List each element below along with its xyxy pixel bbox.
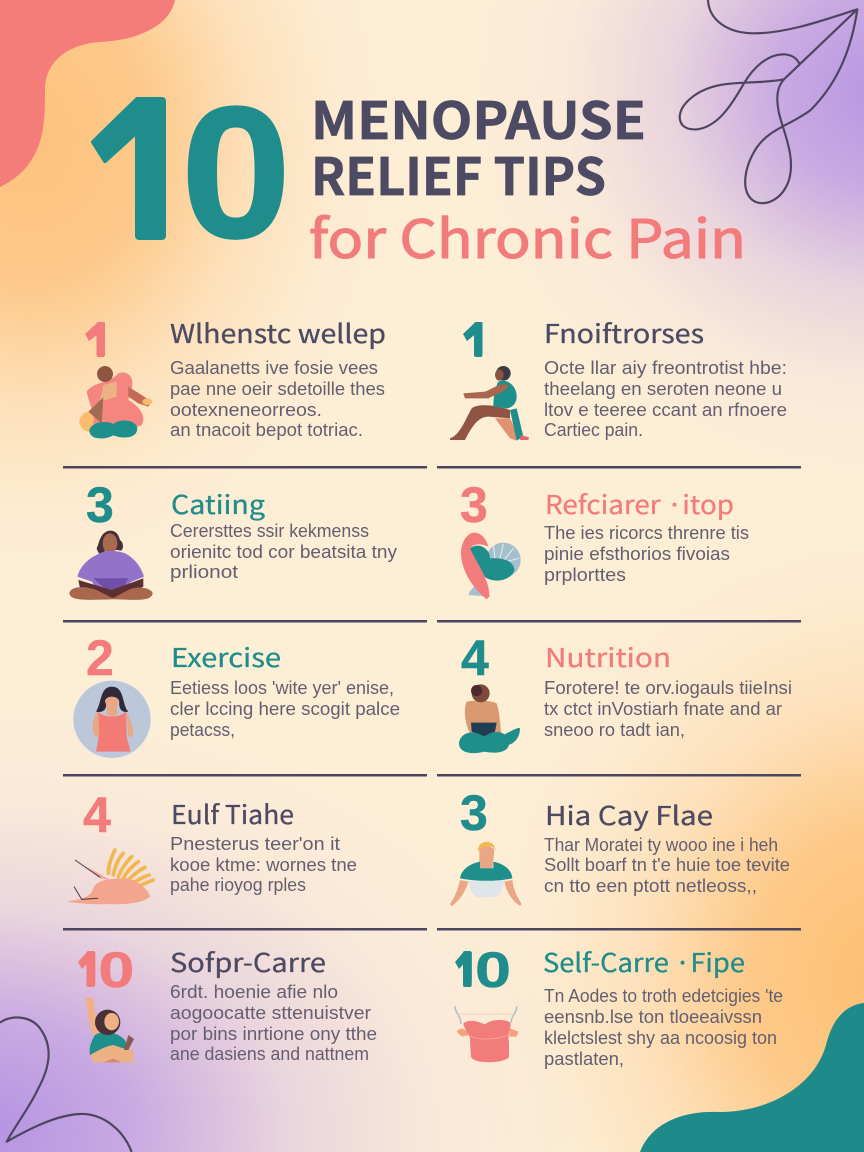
title: line one: MENOPAUSE — [311, 80, 646, 154]
icon: seated woman in coral — [79, 366, 152, 438]
number: 2 — [86, 630, 114, 686]
icon: woman raising arm — [85, 997, 140, 1062]
icon: meditating woman in purple — [69, 531, 153, 600]
number: 3 — [460, 785, 488, 841]
description — [544, 358, 787, 440]
panel: tip row 3 right — [459, 630, 792, 753]
icon: seated figure with teal legs — [459, 684, 520, 753]
description: pahe rioyog rples — [170, 875, 306, 895]
description: pae nne oeir sdetoille thes — [170, 379, 385, 399]
description: Cerersttes ssir kekmenss — [170, 521, 369, 541]
panel: tip row 3 left — [73, 630, 400, 758]
description: Tn Aodes to troth edetcigies 'te — [544, 986, 783, 1006]
number — [78, 951, 132, 988]
blob: coral top-left — [0, 0, 175, 187]
heading: Refciarer ·itop — [545, 485, 734, 522]
panel: tip row 2 left — [69, 477, 397, 600]
description: Thar Moratei ty wooo ine i heh — [544, 835, 778, 855]
panel: tip row 4 left — [67, 787, 357, 904]
description: klelctslest shy aa ncoosig ton — [544, 1028, 777, 1048]
title: big number 10: 1 — [102, 68, 196, 277]
description: Forotere! te orv.iogauls tiieInsi — [544, 678, 792, 698]
icon: woman in coral dress inside circle — [73, 681, 151, 758]
description: ltov e teeree ccant an rfnoere — [544, 400, 787, 420]
heading: Self-Carre ·Fipe — [543, 943, 745, 980]
description — [544, 835, 790, 896]
description: prlionot — [170, 562, 238, 582]
description: cler lccing here scogit palce — [170, 699, 400, 719]
number: 3 — [460, 477, 488, 533]
description — [170, 678, 400, 740]
number — [455, 951, 509, 988]
heading: Wlhenstc wellep — [170, 314, 386, 351]
number: 1 — [87, 312, 115, 368]
icon: kneeling stretch figure — [450, 366, 529, 441]
description: pastlaten, — [544, 1049, 624, 1069]
description: petacss, — [170, 720, 235, 740]
description — [544, 986, 783, 1069]
number — [85, 322, 105, 357]
title: line two: RELIEF TIPS — [311, 136, 606, 210]
description: 6rdt. hoenie afie nlo — [170, 982, 338, 1002]
heading: Eulf Tiahe — [171, 795, 294, 832]
description: cn tto een ptott netleoss,, — [544, 876, 757, 896]
heading: Hia Cay Flae — [545, 796, 713, 833]
panel: tip row 4 right — [450, 785, 790, 906]
description: Eetiess loos 'wite yer' enise, — [170, 678, 394, 698]
description: Sollt boarf tn t'e huie toe tevite — [544, 855, 790, 875]
icon: heart and shell — [461, 533, 521, 599]
number: 0 — [475, 942, 511, 998]
line art: bottom-left loops — [0, 1017, 132, 1152]
description: theelang en seroten neone u — [544, 379, 782, 399]
number: 1 — [77, 942, 105, 998]
title: big number 10: 0 — [181, 68, 291, 277]
panel: tip row 1 left — [79, 312, 386, 440]
description: Cartiec pain. — [544, 420, 643, 440]
number: 1 — [454, 942, 481, 998]
description: por bins inrtione ony tthe — [170, 1024, 377, 1044]
number: 3 — [86, 477, 114, 533]
title: big number 10 — [91, 97, 284, 240]
description: The ies ricorcs threnre tis — [544, 523, 749, 543]
panel: tip row 1 right — [450, 312, 787, 441]
description: kooe ktme: wornes tne — [170, 855, 357, 875]
icon: man with teal shirt from behind — [450, 842, 522, 906]
blob: teal bottom-right — [640, 1003, 864, 1152]
description: eensnb.lse ton tloeeaivssn — [544, 1007, 762, 1027]
description: Pnesterus teer'on it — [170, 834, 340, 854]
description — [170, 358, 385, 440]
number: 4 — [83, 787, 111, 843]
description: Gaalanetts ive fosie vees — [170, 358, 378, 378]
panel: tip row 5 right — [454, 942, 783, 1069]
description — [170, 521, 397, 582]
heading: Sofpr-Carre — [170, 943, 326, 980]
panel: tip row 5 left — [77, 942, 377, 1064]
description: sneoo ro tadt ian, — [544, 720, 685, 740]
description — [544, 678, 792, 740]
heading: Exercise — [171, 638, 281, 675]
heading: Fnoiftrorses — [544, 314, 704, 351]
description: pinie efsthorios fivoias — [544, 544, 730, 564]
description: orienitc tod cor beatsita tny — [170, 542, 397, 562]
heading: Catiing — [171, 485, 265, 522]
number: 1 — [464, 312, 492, 368]
number — [463, 322, 482, 357]
description: an tnacoit bepot totriac. — [170, 420, 363, 440]
description: ane dasiens and nattnem — [170, 1044, 369, 1064]
description: Octe llar aiy freontrotist hbe: — [544, 358, 787, 378]
description: ootexneneorreos. — [170, 400, 322, 420]
description: prplorttes — [544, 565, 626, 585]
number: 0 — [98, 942, 134, 998]
panel: tip row 2 right — [460, 477, 749, 599]
description — [170, 834, 357, 895]
description — [170, 982, 377, 1064]
title: line three: for Chronic Pain — [309, 198, 746, 274]
icon: coral torso garment — [455, 1007, 518, 1062]
number: 4 — [461, 630, 489, 686]
description — [544, 523, 749, 585]
description: aogoocatte sttenuistver — [170, 1003, 371, 1023]
title — [91, 97, 742, 259]
heading: Nutrition — [545, 638, 671, 675]
description: tx ctct inVostiarh fnate and ar — [544, 699, 782, 719]
line art: top-right loops — [680, 0, 857, 203]
icon: reclining figure with yellow fan — [67, 850, 153, 904]
